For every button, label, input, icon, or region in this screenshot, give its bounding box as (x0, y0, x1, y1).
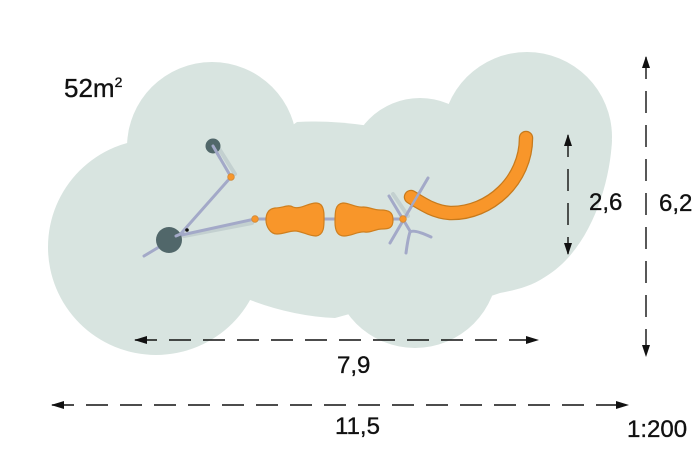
safety zone background (48, 52, 612, 355)
dimension arrow: width 7,9 (134, 336, 539, 344)
area label: 52m (64, 73, 115, 103)
dimension arrow: width 11,5 (51, 401, 629, 409)
large grey post (156, 227, 182, 253)
dimension label 7,9: 7,9 (337, 352, 370, 379)
shadow lines (184, 147, 408, 236)
play equipment plan (144, 138, 526, 256)
dimension arrow: height 6,2 (642, 56, 650, 357)
dimension label 6,2: 6,2 (659, 190, 692, 217)
orange body two (335, 203, 393, 236)
dimension arrow: height 2,6 (564, 134, 572, 255)
pole over slide (412, 178, 428, 205)
area label: 2 (115, 74, 123, 90)
small grey post (206, 138, 220, 154)
dimension label 11,5: 11,5 (335, 413, 380, 440)
dimension label 2,6: 2,6 (589, 189, 622, 216)
connecting poles (144, 146, 431, 256)
scale label: 1:200 (627, 416, 687, 443)
orange joints (228, 174, 406, 222)
pole over post (176, 146, 220, 236)
orange body one (266, 203, 324, 236)
black bolt (185, 228, 189, 232)
orange curved slide (411, 138, 526, 213)
